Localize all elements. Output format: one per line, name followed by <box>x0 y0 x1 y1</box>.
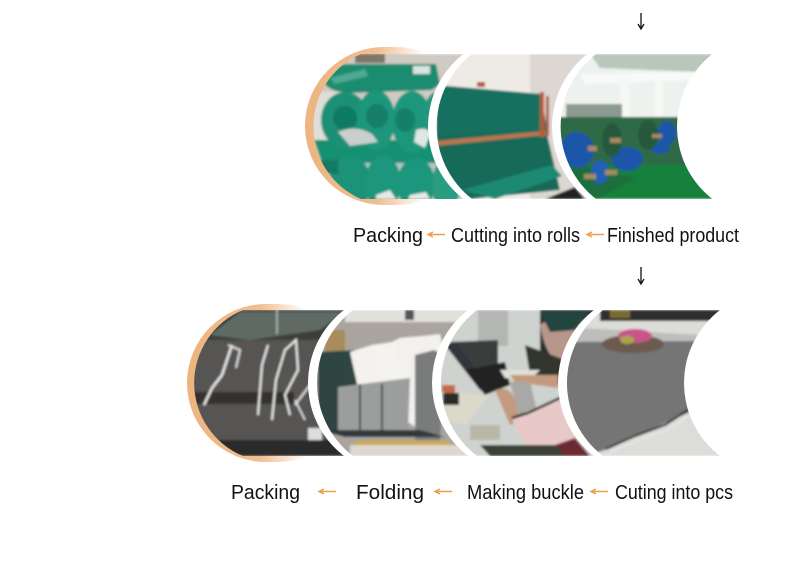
photo: cutting into rolls <box>436 54 588 199</box>
panel: lower process photo strip <box>187 304 720 462</box>
white ring: buckle photo <box>432 291 616 475</box>
white ring: cutting photo <box>428 34 612 218</box>
panel: upper process photo strip <box>305 47 712 205</box>
orange frame: upper strip <box>305 47 475 205</box>
photo: folding stacks <box>317 310 468 456</box>
label: Cutting into rolls: Cutting into rolls <box>451 225 580 247</box>
white ring: finished product photo <box>552 34 736 218</box>
white bite: lower strip right edge <box>684 291 801 475</box>
arrow: orange left 5 <box>591 489 608 494</box>
orange frame: lower strip <box>187 304 357 462</box>
label: Making buckle: Making buckle <box>467 482 584 504</box>
label: Packing: Packing <box>353 225 423 247</box>
arrow: orange left 4 <box>435 489 452 494</box>
label: Cuting into pcs: Cuting into pcs <box>615 482 733 504</box>
photo: finished product <box>560 54 712 199</box>
label: Folding: Folding <box>356 482 424 504</box>
photo: packed green rolls <box>313 54 464 199</box>
arrow: orange left 3 <box>319 489 336 494</box>
white bite: upper strip right edge <box>677 34 801 218</box>
arrow: down to finished product <box>638 13 644 29</box>
white ring: folding photo <box>308 291 492 475</box>
arrow: down to cutting into pcs <box>638 267 644 284</box>
arrow: orange left 2 <box>587 232 604 237</box>
caption row: upper process labels <box>353 225 739 247</box>
caption row: lower process labels <box>231 482 733 504</box>
white ring: cutting pieces photo <box>558 291 742 475</box>
photo: cutting into pieces <box>560 310 730 456</box>
arrow: orange left 1 <box>428 232 445 237</box>
label: Packing lower: Packing <box>231 482 300 504</box>
photo: packed bags <box>194 310 344 456</box>
photo: making buckle <box>435 310 595 456</box>
label: Finished product: Finished product <box>607 225 739 247</box>
